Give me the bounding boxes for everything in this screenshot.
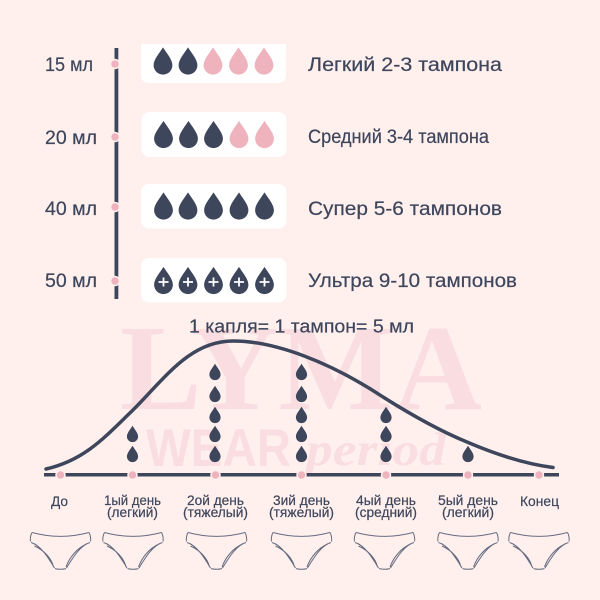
drops: day 1	[127, 426, 138, 462]
flow curve	[46, 341, 553, 469]
text: medium: Средний 3-4 тампона	[308, 127, 489, 148]
day labels: 1ый день	[104, 493, 161, 508]
underwear icons	[30, 532, 569, 569]
day labels: 5ый день	[438, 493, 498, 508]
panel: ultra drops	[141, 258, 286, 302]
day labels	[51, 493, 559, 520]
drops: day 4	[380, 407, 392, 462]
day labels: (тяжелый)	[183, 505, 248, 520]
day labels: (легкий)	[107, 505, 158, 520]
volume label: 50 мл: 50 мл	[45, 271, 97, 292]
day labels: 4ый день	[356, 493, 416, 508]
volume label: 40 мл: 40 мл	[45, 199, 97, 220]
panel: super drops	[141, 184, 286, 228]
watermark: LYMA WEAR period: period	[301, 424, 448, 476]
drops: day 5	[462, 446, 474, 462]
day labels: До	[51, 494, 68, 509]
day labels: 2ой день	[187, 493, 244, 508]
text: ultra: Ультра 9-10 тампонов	[308, 271, 517, 292]
day labels: Конец	[520, 494, 559, 509]
volume label: 15 мл: 15 мл	[45, 55, 93, 76]
drops: day 3	[296, 364, 307, 462]
timeline axis	[44, 470, 559, 480]
drops: day 2	[209, 364, 221, 462]
text: super: Супер 5-6 тампонов	[308, 199, 502, 220]
panel: light drops	[141, 44, 286, 83]
day labels: (легкий)	[442, 505, 494, 520]
watermark: LYMA WEAR period: LYMA	[120, 301, 482, 436]
day labels: 3ий день	[273, 493, 330, 508]
text: light: Легкий 2-3 тампона	[308, 55, 502, 76]
vertical scale	[110, 48, 120, 299]
volume label: 20 мл: 20 мл	[45, 128, 97, 149]
day labels: (тяжелый)	[269, 505, 334, 520]
note: drop equals: 1 капля= 1 тампон= 5 мл	[189, 316, 414, 336]
panel: medium drops	[142, 112, 286, 157]
watermark: LYMA WEAR period: WEAR	[146, 419, 291, 478]
day labels: (средний)	[355, 505, 417, 520]
